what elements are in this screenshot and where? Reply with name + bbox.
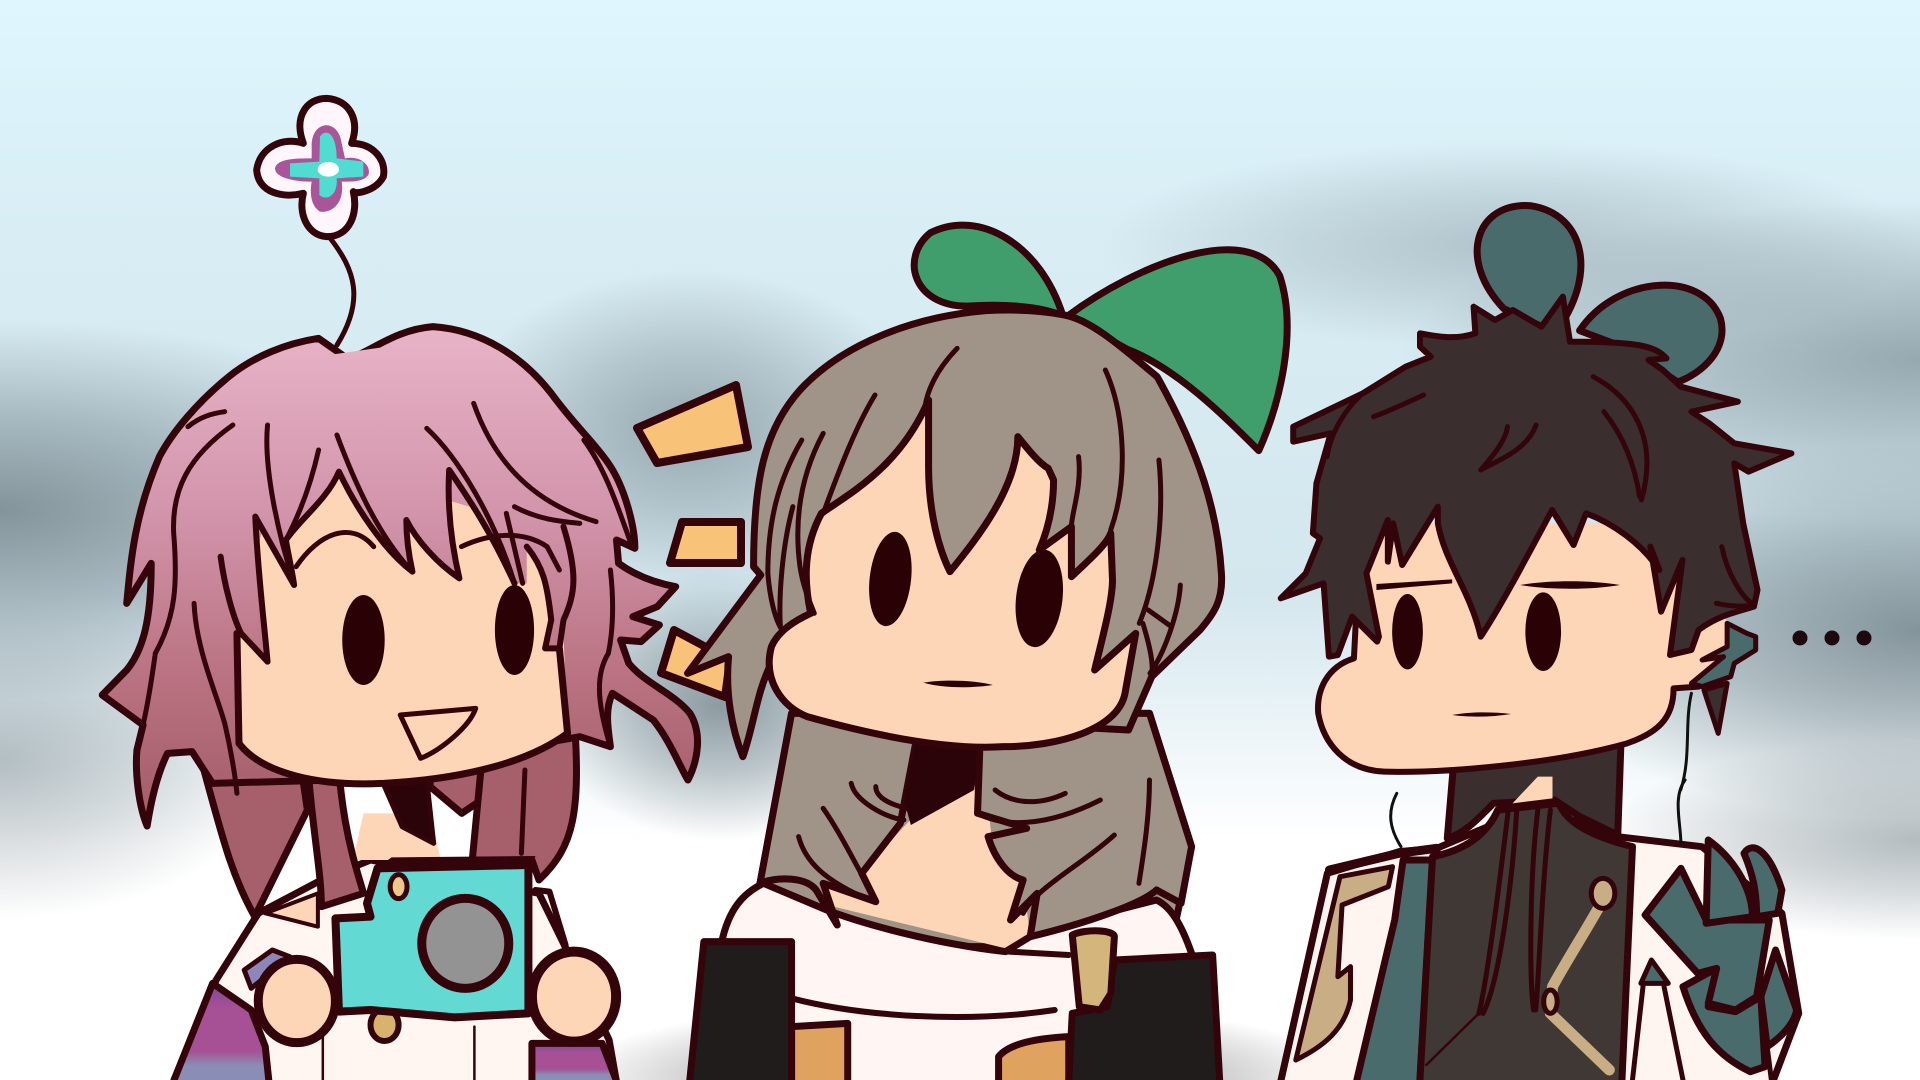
lower hair locks	[188, 713, 576, 917]
mouth	[400, 708, 476, 758]
torso lines	[1479, 810, 1550, 1013]
character: dark-haired boy with teal bows	[1281, 206, 1799, 1080]
teal strap	[1357, 860, 1433, 1080]
eyebrows	[296, 532, 559, 570]
bangs fill	[176, 340, 596, 662]
black sleeve: left	[690, 942, 792, 1080]
neck	[1513, 777, 1553, 803]
white collar	[339, 747, 490, 847]
hair silhouette	[688, 310, 1222, 757]
hair silhouette	[102, 327, 698, 826]
earpiece	[1691, 623, 1756, 733]
black scarf	[904, 713, 988, 825]
hair strand lines	[1327, 377, 1752, 606]
neck	[353, 813, 441, 860]
black sleeve: right	[1069, 955, 1220, 1080]
hand: right	[532, 952, 616, 1042]
tan panel	[1296, 867, 1393, 1060]
head	[1281, 297, 1791, 790]
character: grey-haired girl with green bow	[688, 225, 1287, 1080]
gold zip detail	[1550, 900, 1609, 1070]
white top	[693, 883, 1213, 1080]
jacket	[1281, 817, 1799, 1080]
face with bangs outline	[769, 400, 1136, 747]
mouth	[923, 681, 993, 687]
black tie	[367, 747, 434, 843]
teal hair bows	[1477, 206, 1722, 382]
curled hair: right	[978, 713, 1192, 937]
character: pink-haired girl	[102, 98, 698, 1080]
camera	[335, 865, 528, 1017]
spear trim	[1632, 960, 1683, 1080]
body	[1281, 713, 1799, 1080]
tan strap	[1072, 931, 1114, 1010]
green bow	[914, 225, 1287, 451]
hair strand lines	[143, 403, 633, 793]
right sleeve	[532, 1043, 616, 1080]
camera button	[371, 1009, 399, 1041]
curled hair: left	[760, 713, 921, 925]
chest skin	[265, 893, 318, 927]
orange clasp: left	[792, 1023, 848, 1080]
exclamation marks	[637, 385, 748, 697]
shoulder band	[1329, 848, 1437, 870]
head	[688, 310, 1222, 757]
eyes	[1392, 592, 1561, 671]
eyes	[864, 530, 1068, 649]
bangs outline	[221, 470, 573, 662]
eyelids	[1376, 579, 1620, 590]
orange clasp: right	[999, 1037, 1069, 1080]
left sleeve	[244, 950, 290, 988]
earphone wires	[1391, 780, 1685, 847]
neck hair	[1447, 713, 1622, 838]
body: shirt, collar, hands and camera	[174, 713, 616, 1080]
hair strand lines	[768, 348, 1180, 677]
neck	[827, 747, 1030, 948]
head	[102, 327, 698, 826]
icon: floating clover halo	[257, 98, 384, 345]
shirt lines	[323, 1027, 474, 1080]
dark torso	[1420, 803, 1632, 1080]
jaw outline	[1318, 623, 1699, 772]
earpiece wire	[1681, 693, 1691, 790]
lower body	[690, 713, 1220, 1080]
mouth	[1452, 712, 1511, 717]
jaw and cheek lines	[237, 633, 568, 784]
eyes	[342, 585, 534, 685]
collar line	[792, 952, 1069, 1017]
teal shoulder bow	[1645, 840, 1797, 1080]
long back hair	[760, 713, 1192, 947]
camera strap	[535, 890, 566, 945]
shirt	[174, 860, 616, 1080]
face	[1318, 523, 1731, 772]
face	[237, 467, 568, 784]
ellipsis dots	[1792, 630, 1872, 646]
hand: left	[258, 959, 335, 1043]
hair	[1281, 297, 1791, 657]
